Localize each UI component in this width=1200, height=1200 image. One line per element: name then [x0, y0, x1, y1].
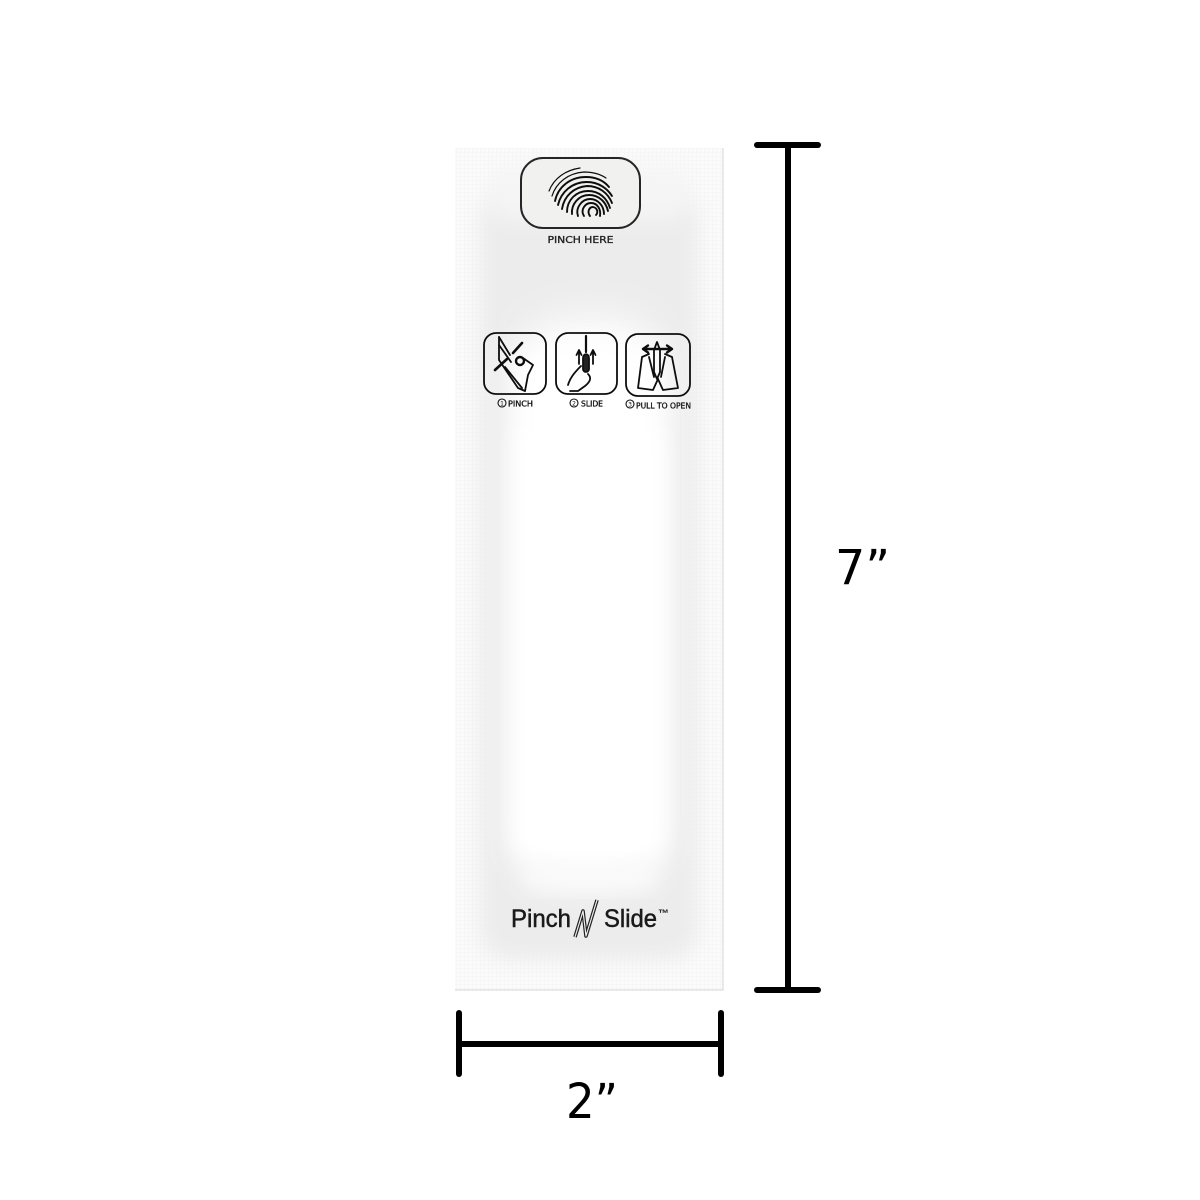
dimension: height bracket	[757, 145, 818, 990]
label: step 2: SLIDE	[581, 400, 603, 408]
label: step 3: 3	[628, 402, 632, 408]
panel: white packet	[455, 148, 723, 990]
dimension: width bracket	[459, 1013, 721, 1074]
label: step 1	[498, 399, 533, 408]
label: 2 inches: 2”	[566, 1074, 618, 1130]
label: step 2: 2	[572, 400, 576, 408]
label: step 1: 1	[500, 400, 504, 408]
infographic: packet with dimensions	[455, 142, 886, 1118]
fingerprint pinch zone	[521, 158, 640, 228]
logo: Pinch N Slide: Slide	[604, 905, 657, 933]
label: step 3: PULL TO OPEN	[636, 402, 691, 410]
label: 7 inches: 7”	[835, 540, 890, 596]
icon: fingerprint	[549, 168, 612, 216]
icon: step 1 pinch	[484, 333, 546, 394]
label: step 1: PINCH	[508, 400, 533, 408]
logo: Pinch N Slide: Pinch	[511, 905, 571, 933]
icon: step 2 slide	[556, 333, 617, 394]
label: pinch here: PINCH HERE	[548, 235, 614, 246]
icon: step 3 pull to open	[626, 334, 690, 396]
label: step 2	[570, 399, 603, 408]
logo: Pinch N Slide	[511, 900, 669, 937]
logo: Pinch N Slide: ™	[658, 908, 669, 920]
